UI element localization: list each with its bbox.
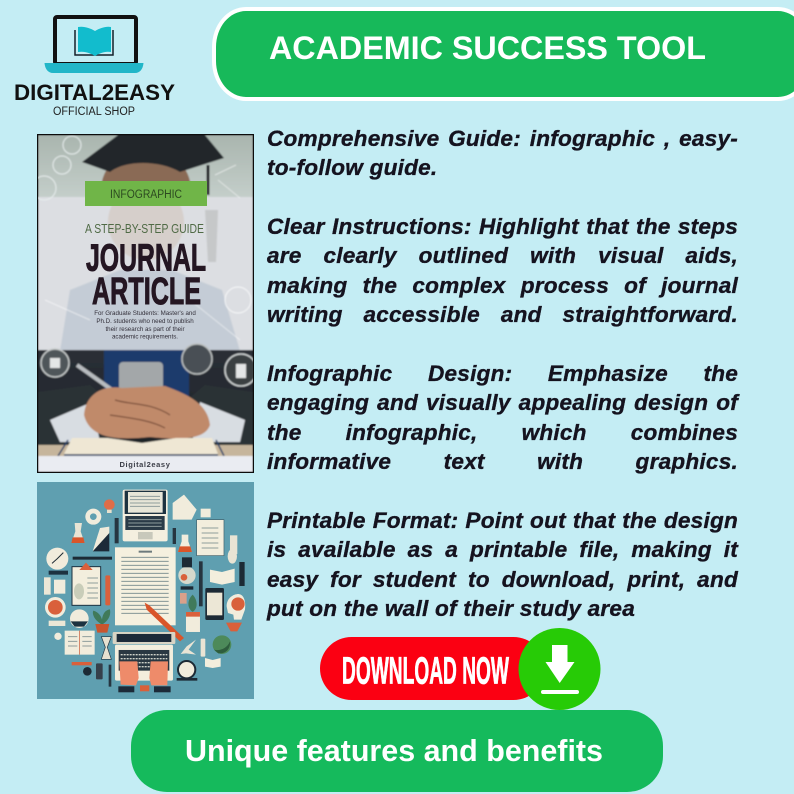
pencil [145, 603, 184, 641]
text block: printable format: Printable Format: Point out that the design [267, 508, 738, 533]
cover description: For Graduate Students: Master's and [94, 310, 196, 317]
text block: printable format: is available as a printable file, making it [267, 537, 738, 562]
text block: printable format: put on the wall of their study area [267, 596, 635, 621]
text block: infographic design: Infographic Design: Emphasize the [267, 361, 738, 386]
small plant [188, 595, 197, 612]
flasks and gear [71, 523, 85, 543]
small left items [44, 577, 51, 595]
text block: clear instructions: are clearly outlined with visual aids, [267, 243, 738, 268]
cover description: Ph.D. students who need to publish [96, 318, 194, 325]
clipboard [72, 567, 101, 605]
text block: infographic design: the infographic, which combines [267, 420, 738, 445]
icon: download arrow [518, 628, 600, 710]
cover description [94, 310, 196, 340]
cover label [85, 181, 207, 206]
text block: printable format: easy for student to download, print, and [267, 567, 738, 592]
cover label: INFOGRAPHIC [110, 189, 182, 201]
text block: comprehensive guide: to-follow guide. [267, 155, 437, 180]
plant [93, 609, 110, 625]
cover description: their research as part of their [105, 326, 185, 333]
banner text: Unique features and benefits [185, 734, 603, 768]
icon: laptop with book [44, 17, 144, 73]
button text: DOWNLOAD NOW [342, 650, 509, 692]
text block: infographic design: engaging and visually appealing design of [267, 390, 738, 415]
text block: infographic design: informative text with graphics. [267, 449, 738, 474]
logo [14, 17, 175, 118]
cover subtitle: A STEP-BY-STEP GUIDE [85, 222, 204, 236]
cover title: JOURNAL [86, 238, 206, 280]
text block: printable format [266, 508, 739, 621]
cover photo: graduate [32, 135, 257, 472]
cover title [86, 244, 206, 305]
text block: clear instructions: Clear Instructions: Highlight that the steps [267, 214, 738, 239]
header title: ACADEMIC SUCCESS TOOL [269, 30, 706, 66]
text block: comprehensive guide [267, 126, 738, 180]
globe and timer [213, 635, 231, 654]
center document [115, 547, 176, 625]
header banner [212, 7, 794, 101]
cover footer: Digital2easy [120, 460, 171, 469]
bottom laptop [113, 632, 175, 644]
bottom banner [131, 710, 663, 792]
right documents [173, 495, 197, 520]
download button [320, 628, 600, 710]
clock [46, 548, 68, 570]
logo tagline: OFFICIAL SHOP [53, 106, 135, 118]
top laptop [123, 490, 168, 541]
cover description: academic requirements. [112, 334, 178, 340]
hourglass [101, 637, 111, 659]
book cover [32, 134, 257, 473]
right book [210, 569, 235, 585]
text block: clear instructions: making the complex process of journal [267, 273, 738, 298]
text block: infographic design [267, 361, 740, 474]
tablet [205, 588, 224, 620]
illustration: study desk [37, 482, 254, 699]
round flask [178, 567, 196, 584]
open book [65, 631, 95, 655]
text block: clear instructions: writing accessible and straightforward. [267, 302, 738, 327]
logo name: DIGITAL2EASY [14, 80, 175, 105]
cover title: ARTICLE [92, 271, 201, 313]
text block: clear instructions [266, 214, 738, 327]
text block: comprehensive guide: Comprehensive Guide: infographic , easy- [267, 126, 738, 151]
